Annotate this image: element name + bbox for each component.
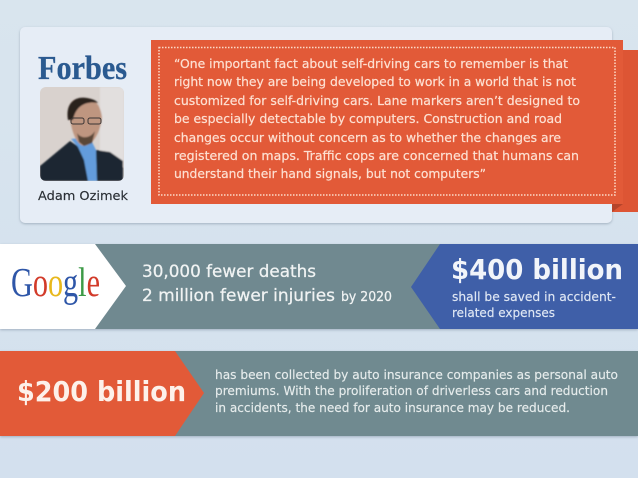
orange arrow: $200 billion: $200 billion bbox=[17, 375, 186, 408]
insurance description: premiums. With the proliferation of driverless cars and reduction bbox=[215, 383, 608, 398]
quote text: registered on maps. Traffic cops are concerned that humans can bbox=[174, 149, 579, 163]
blue arrow: $400 billion: $400 billion bbox=[451, 253, 623, 286]
caption: Adam Ozimek: Adam Ozimek bbox=[38, 188, 129, 203]
portrait photo bbox=[40, 87, 124, 181]
quote text bbox=[174, 57, 580, 181]
orange arrow: $200 billion bbox=[0, 351, 204, 436]
insurance description bbox=[215, 367, 618, 415]
quote text: be especially detectable by computers. Construction and road bbox=[174, 112, 562, 126]
quote text: understand their hand signals, but not computers” bbox=[174, 167, 486, 181]
insurance description: in accidents, the need for auto insurance may be reduced. bbox=[215, 400, 570, 415]
band: auto insurance bbox=[0, 351, 638, 436]
band: Google statistics bbox=[0, 244, 638, 329]
quote text: customized for self-driving cars. Lane markers aren’t designed to bbox=[174, 94, 580, 108]
stat: fewer deaths and injuries: by 2020 bbox=[341, 290, 392, 305]
blue arrow: $400 billion: related expenses bbox=[452, 305, 555, 320]
Forbes logo: Forbes bbox=[38, 50, 127, 87]
insurance description: has been collected by auto insurance companies as personal auto bbox=[215, 367, 618, 382]
Google logo: Google bbox=[11, 259, 100, 305]
quote text: changes occur without concern as to whether the changes are bbox=[174, 131, 561, 145]
stat: fewer deaths and injuries bbox=[142, 262, 392, 306]
quote text: right now they are being developed to work in a world that is not bbox=[174, 75, 576, 89]
ribbon back fold bbox=[612, 50, 638, 212]
blue arrow: $400 billion: shall be saved in accident- bbox=[452, 289, 616, 304]
blue arrow: $400 billion bbox=[411, 244, 638, 329]
stat: fewer deaths and injuries: 30,000 fewer deaths bbox=[142, 262, 316, 282]
panel: orange quote box bbox=[151, 40, 623, 204]
panel: Forbes quote card bbox=[20, 27, 612, 223]
stat: fewer deaths and injuries: 2 million fewer injuries bbox=[142, 286, 335, 306]
quote text: “One important fact about self-driving cars to remember is that bbox=[174, 57, 568, 71]
white Google arrow bbox=[0, 244, 126, 329]
